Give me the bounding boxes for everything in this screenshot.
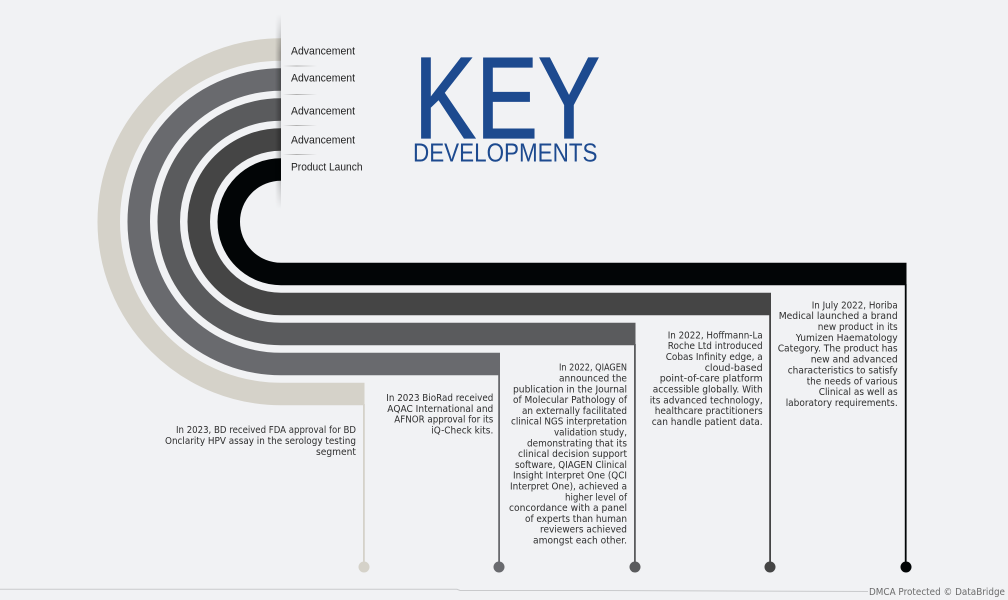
text block: Horiba Medical launch: Yumizen Haematology [795,333,898,344]
text block: BD FDA approval: Onclarity HPV assay in the serology testing [165,436,356,447]
text block: Hoffmann-La Roche launch [650,330,763,428]
text block: BioRad approval: In 2023 BioRad received [386,393,493,404]
band labels: Product Launch [291,162,362,174]
text block: QIAGEN publication: of Molecular Pathology of [513,395,628,406]
text block: BioRad approval: iQ-Check kits. [431,426,493,436]
text block: Horiba Medical launch: laboratory requirements. [786,398,898,409]
text block: Hoffmann-La Roche launch: Roche Ltd introduced [668,341,763,352]
text block: QIAGEN publication: reviewers achieved [540,525,627,536]
text block: BD FDA approval [165,425,356,458]
text block: Horiba Medical launch: characteristics to satisfy [788,365,898,376]
text block: QIAGEN publication: demonstrating that its [527,438,627,449]
band 3: mid grey timeline band [169,110,640,572]
text block: QIAGEN publication: software, QIAGEN Clinical [515,460,627,471]
text block: QIAGEN publication: announced the [559,374,627,384]
text block: Hoffmann-La Roche launch: Cobas Infinity edge, a [666,352,763,363]
band labels [291,46,362,174]
text block: QIAGEN publication: concordance with a panel [509,503,627,514]
band labels: Advancement [291,46,356,58]
text block: QIAGEN publication: Insight Interpret One (QCI [513,471,627,482]
title: KEY [414,33,600,163]
text block: BioRad approval: AQAC International and [387,404,493,415]
text block: Horiba Medical launch [778,300,898,409]
text block: BD FDA approval: In 2023, BD received FDA approval for BD [176,425,356,436]
vertical shadow divider [276,18,281,204]
text block: QIAGEN publication: amongst each other. [533,536,627,546]
text block: Hoffmann-La Roche launch: cloud-based [705,363,763,374]
text block: QIAGEN publication: of experts than human [525,514,627,525]
text block: QIAGEN publication: an externally facilitated [522,406,627,417]
band labels: Advancement [291,73,356,85]
text block: Horiba Medical launch: Medical launched a brand [779,311,898,322]
text block: Horiba Medical launch: Category. The product has [778,344,898,355]
text block: BD FDA approval: segment [316,447,356,458]
text block: QIAGEN publication: clinical decision support [518,449,627,460]
text block: QIAGEN publication: higher level of [565,492,628,503]
text block: Horiba Medical launch: new product in its [818,322,898,333]
text block: Hoffmann-La Roche launch: In 2022, Hoffmann-La [668,330,763,341]
text block: QIAGEN publication: Interpret One), achieved a [510,482,627,492]
text block: QIAGEN publication: validation study, [554,428,627,438]
band 5: black timeline band [229,170,911,572]
text block: QIAGEN publication: clinical NGS interpretation [511,417,627,428]
text block: Hoffmann-La Roche launch: its advanced technology, [650,395,763,406]
text block: Hoffmann-La Roche launch: healthcare practitioners [655,406,763,417]
text block: BioRad approval [386,393,493,436]
text block: Horiba Medical launch: Clinical as well as [819,387,898,398]
text block: Hoffmann-La Roche launch: can handle patient data. [652,417,763,428]
text block: Horiba Medical launch: the needs of various [807,376,898,387]
text block: Hoffmann-La Roche launch: accessible globally. With [653,384,763,396]
text block: Horiba Medical launch: In July 2022, Horiba [812,300,898,311]
band labels: Advancement [291,106,356,118]
band 1: beige timeline band [109,50,370,572]
text block: QIAGEN publication: In 2022, QIAGEN [559,363,627,374]
band 2: light grey timeline band [139,80,504,572]
band labels: Advancement [291,134,356,146]
text block: QIAGEN publication [509,363,628,546]
text block: QIAGEN publication: publication in the Journal [513,384,627,395]
text block: Hoffmann-La Roche launch: point-of-care platform [660,374,763,385]
title: DEVELOPMENTS [413,140,598,168]
band 4: dark grey timeline band [199,140,776,572]
text block: Horiba Medical launch: new and advanced [811,355,898,366]
text block: BioRad approval: AFNOR approval for its [394,415,493,426]
